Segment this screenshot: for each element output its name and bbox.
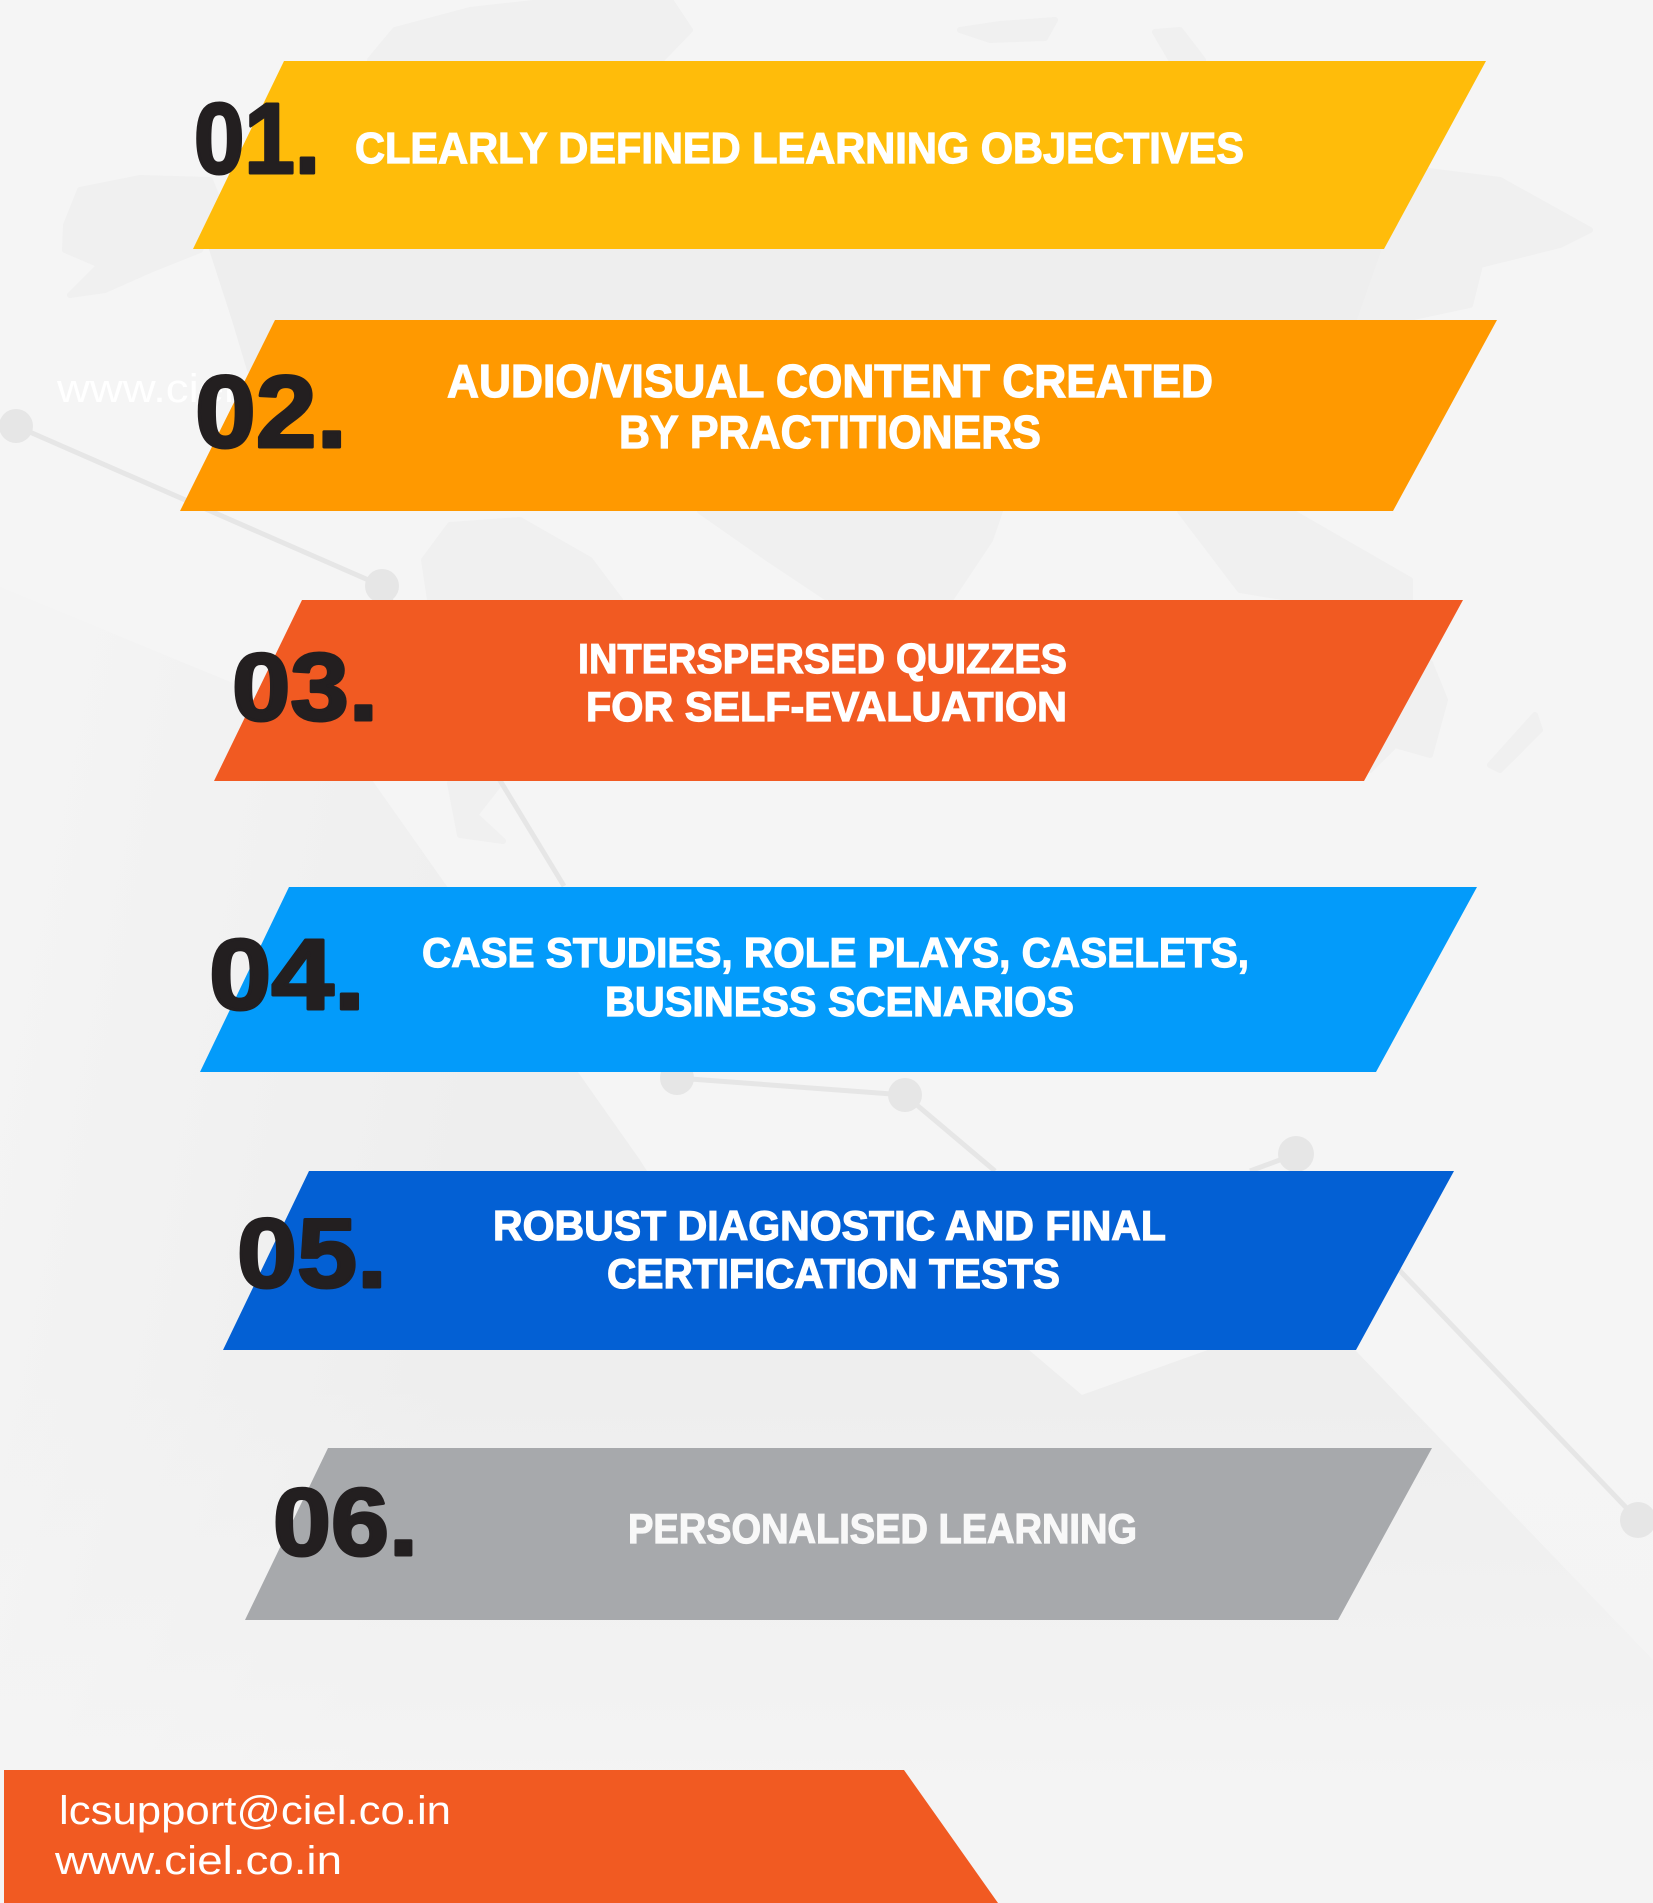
number 06: 06. [273,1469,418,1576]
panel: item 01 [193,61,1486,249]
text: email: lcsupport@ciel.co.in [59,1789,451,1833]
text: audio visual content [447,355,1213,458]
number 03: 03. [232,634,378,741]
banner 04 [200,887,1477,1072]
panel: item 03 [214,600,1463,781]
text: interspersed quizzes: FOR SELF-EVALUATION [586,683,1067,730]
text: case studies [422,929,1249,1025]
text: robust diagnostic: CERTIFICATION TESTS [607,1250,1060,1297]
background network lines and nodes [0,409,1653,1538]
text: interspersed quizzes: INTERSPERSED QUIZZES [578,635,1067,682]
number 01: 01. [194,83,320,195]
world map watermark [65,0,1590,841]
banner 01 [193,61,1486,249]
text: case studies: CASE STUDIES, ROLE PLAYS, CASELETS, [422,929,1249,976]
text: website: www.ciel.co.in [54,1839,342,1883]
text: robust diagnostic: ROBUST DIAGNOSTIC AND FINAL [493,1202,1166,1249]
number 04: 04. [209,919,365,1031]
text: personalised learning: PERSONALISED LEARNING [628,1505,1137,1552]
panel: item 02 [180,320,1497,511]
text: interspersed quizzes [578,635,1067,730]
banner 06 [245,1448,1432,1620]
banner 03 [214,600,1463,781]
panel: item 04 [200,887,1477,1072]
text: audio visual content: BY PRACTITIONERS [619,406,1041,458]
footer band [4,1770,998,1903]
panel: item 06 [245,1448,1432,1620]
text: robust diagnostic [493,1202,1166,1297]
ghost web address behind banner 2: www.ciel.co.in [56,367,343,411]
text: clearly defined learning objectives: CLEARLY DEFINED LEARNING OBJECTIVES [355,124,1244,173]
panel: contact footer [4,1770,998,1903]
number 05: 05. [237,1198,387,1308]
banner 05 [223,1171,1454,1350]
banner 02 [180,320,1497,511]
panel: item 05 [223,1171,1454,1350]
text: case studies: BUSINESS SCENARIOS [605,978,1074,1025]
text: audio visual content: AUDIO/VISUAL CONTENT CREATED [447,355,1213,407]
background geometric shapes [0,587,1653,1903]
number 02: 02. [195,355,347,469]
